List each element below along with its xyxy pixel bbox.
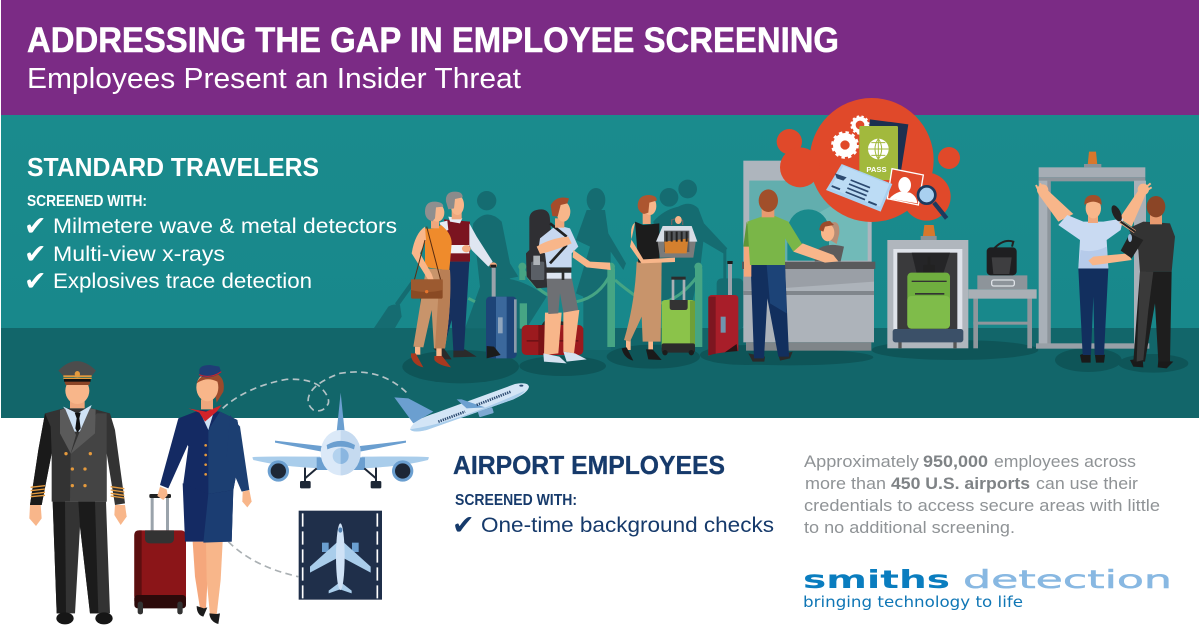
illustration: security checkpoint	[707, 98, 1188, 373]
security officer with hand scanner	[1088, 196, 1175, 368]
floor shadows	[707, 340, 1188, 373]
check-in agent	[815, 221, 844, 261]
older woman traveler with shoulder bag	[411, 202, 452, 367]
floor shadows	[402, 345, 793, 383]
walk-through metal detector	[1036, 152, 1149, 349]
illustration: travelers in queue	[374, 180, 793, 383]
illustration: airplanes and runway	[252, 383, 529, 600]
checklist: traveler screening methods: ✔	[24, 266, 47, 297]
traveler being screened with raised arms	[1036, 183, 1152, 363]
older man traveler	[433, 192, 497, 359]
airplane front view	[252, 393, 429, 488]
text block: employee statistic: 950,000	[923, 453, 988, 471]
checklist: employee screening: ✔	[452, 510, 475, 541]
icon: magnifying glass	[918, 186, 947, 218]
text block: standard travelers	[24, 152, 397, 297]
text block: employee statistic: to no additional screening.	[804, 519, 1015, 537]
logo: smiths detection: detection	[963, 565, 1172, 594]
checklist: traveler screening methods: Multi-view x-rays	[53, 242, 225, 266]
title: ADDRESSING THE GAP IN EMPLOYEE SCREENING	[27, 21, 839, 60]
navy suitcase	[486, 265, 517, 358]
checklist: traveler screening methods: ✔	[24, 211, 47, 242]
text block: employee statistic: can use their	[1036, 475, 1139, 493]
text block: employee statistic: 450 U.S. airports	[891, 475, 1030, 493]
logo: smiths detection	[803, 565, 1172, 611]
icon: gears	[833, 116, 869, 157]
dashed flight path lower	[228, 542, 298, 577]
text block: employee statistic: more than	[805, 475, 886, 493]
checklist: traveler screening methods: ✔	[24, 239, 47, 270]
red suitcase	[134, 494, 186, 614]
text block: employee statistic: employees across	[994, 453, 1136, 471]
text block: employee statistic	[804, 453, 1160, 537]
icon: passport: PASS	[866, 165, 887, 174]
checklist: employee screening: One-time background checks	[481, 513, 774, 537]
red suitcase	[708, 261, 738, 358]
panel: title banner	[1, 0, 1199, 115]
runway with airplane from above	[299, 511, 382, 600]
checklist: traveler screening methods	[24, 211, 397, 297]
subheading: screened with: SCREENED WITH:	[27, 193, 147, 210]
rope barrier	[468, 263, 702, 347]
subtitle: Employees Present an Insider Threat	[27, 63, 521, 95]
icon: passport	[859, 119, 908, 180]
heading: standard travelers: STANDARD TRAVELERS	[27, 152, 319, 182]
illustration: flight attendant with suitcase	[134, 365, 252, 624]
checklist: employee screening	[452, 510, 774, 541]
baggage x-ray machine	[887, 225, 968, 348]
table with tray and black bag	[968, 241, 1037, 348]
green suitcase	[662, 277, 695, 355]
airplane taking off	[394, 383, 529, 432]
woman traveler with pet carrier	[622, 195, 697, 361]
icon: boarding pass	[826, 164, 892, 212]
silhouettes of passengers	[374, 180, 743, 350]
heading: airport employees: AIRPORT EMPLOYEES	[453, 452, 725, 480]
traveler at check-in desk in green shirt	[743, 189, 838, 362]
logo: smiths detection: bringing technology to life	[803, 593, 1023, 611]
illustration: pilot	[29, 361, 127, 624]
thought bubble	[777, 98, 960, 222]
checklist: traveler screening methods: Explosives trace detection	[53, 269, 312, 293]
text block: airport employees	[452, 452, 774, 541]
subheading: screened with: SCREENED WITH:	[455, 492, 577, 509]
text block: employee statistic: Approximately	[804, 453, 920, 471]
icon: photo ID	[887, 169, 923, 205]
dashed flight path upper	[223, 372, 407, 411]
check-in booth and desk	[742, 161, 875, 351]
checklist: traveler screening methods: Milmetere wave & metal detectors	[53, 214, 397, 238]
logo: smiths detection: smiths	[803, 565, 950, 594]
text block: employee statistic: credentials to access secure areas with little	[804, 497, 1160, 515]
backpacker traveler	[526, 197, 611, 363]
red duffel bag	[522, 319, 583, 355]
